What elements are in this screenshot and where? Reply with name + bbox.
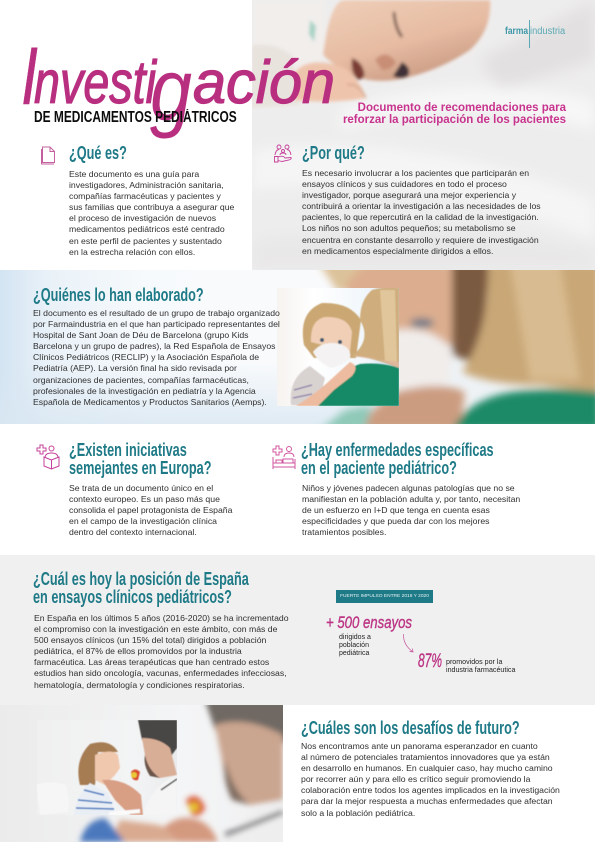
heading: Hay enfermedades específicas: ¿Hay enfermedades específicas	[301, 440, 494, 460]
text: Cuáles son los desafíos: colaboración entre todos los agentes implicados en la investigación	[301, 785, 560, 795]
arrow: to 87%	[403, 634, 414, 652]
text: Quiénes: por Farmaindustria en el que han participado representantes del	[33, 319, 280, 329]
text: dirigidos a población pediátrica: población	[339, 642, 369, 649]
text: Por qué: en medicamentos especialmente dirigidos a ellos.	[302, 246, 493, 256]
text: Qué es: sus familias que contribuya a asegurar que	[69, 202, 234, 212]
text: Cuál es hoy: hematología, dermatología y condiciones respiratorias.	[34, 680, 245, 690]
photo: background doctor blurred	[0, 705, 283, 842]
text: Qué es: en la estrecha relación con ellos.	[69, 247, 195, 257]
title: Investigación	[21, 31, 335, 139]
text: Existen iniciativas: dentro del contexto internacional.	[69, 527, 197, 537]
text: Qué es: medicamentos pediátricos esté centrado	[69, 224, 225, 234]
text: Por qué: pacientes, lo que repercutirá en la calidad de la investigación.	[302, 212, 539, 222]
text: Quiénes: profesionales de la investigación en pediatría y la Agencia	[33, 386, 256, 396]
icon: family in hand	[274, 144, 292, 162]
text: Qué es: en este perfil de pacientes y sustentado	[69, 236, 222, 246]
text: Hay enfermedades: tratamientos posibles.	[302, 527, 386, 537]
text: Existen iniciativas: Se trata de un documento único en el	[69, 483, 213, 493]
text: Quiénes: Hospital de Sant Joan de Déu de Barcelona (grupo Kids	[33, 330, 248, 340]
text: Existen iniciativas: en el campo de la investigación clínica	[69, 516, 217, 526]
photo: doctor examining child	[37, 720, 177, 815]
heading: Cuáles son los desafíos: ¿Cuáles son los desafíos de futuro?	[301, 718, 520, 738]
text: Por qué: Los niños no son adultos pequeños; su metabolismo se	[302, 223, 516, 233]
label: fuerte impulso: FUERTE IMPULSO ENTRE 2016 Y 2020	[340, 594, 429, 599]
text: promovidos por la industria: promovidos por la	[446, 658, 502, 666]
photo: child with mask hugging mother	[277, 288, 399, 406]
subtitle: documento de recomendaciones: reforzar la participación de los pacientes	[343, 114, 566, 126]
text: Por qué: investigador, porque asegurará una mejor experiencia y	[302, 190, 516, 200]
text: Cuál es hoy: el compromiso con la investigación en este ámbito, con más de	[34, 624, 277, 634]
text: Qué es: Este documento es una guía para	[69, 169, 199, 179]
icon: cross, person and bed	[272, 446, 296, 469]
text: Cuáles son los desafíos	[301, 741, 560, 818]
text: dirigidos a población pediátrica	[339, 634, 371, 657]
text: Qué es: el proceso de investigación de nuevos	[69, 213, 216, 223]
text: promovidos por la industria	[446, 658, 516, 674]
text: Por qué: Es necesario involucrar a los pacientes que participarán en	[302, 168, 529, 178]
text: Hay enfermedades	[302, 483, 520, 537]
text: Qué es: investigadores, Administración sanitaria,	[69, 180, 224, 190]
text: Existen iniciativas: contexto europeo. Es un paso más que	[69, 494, 220, 504]
text: Por qué	[302, 168, 541, 256]
title: Investigación: ación	[193, 49, 335, 116]
text: Quiénes: Española de Medicamentos y Productos Sanitarios (Aemps).	[33, 397, 267, 407]
heading: Cuál es hoy la posición: en ensayos clínicos pediátricos?	[33, 586, 232, 606]
heading: Hay enfermedades específicas: en el paciente pediátrico?	[301, 458, 457, 478]
text: Hay enfermedades: de un esfuerzo en I+D que tenga en cuenta esas	[302, 505, 490, 515]
subtitle: documento de recomendaciones	[343, 102, 566, 126]
text: Cuáles son los desafíos: Nos encontramos ante un panorama esperanzador en cuanto	[301, 741, 538, 751]
heading: Quiénes lo han elaborado: ¿Quiénes lo han elaborado?	[33, 285, 204, 305]
text: Hay enfermedades: especificidades y que pueda dar con los mejores	[302, 516, 490, 526]
text: dirigidos a población pediátrica: pediátrica	[339, 650, 369, 657]
text: Quiénes: Barcelona y un grupo de padres), la Red Española de Ensayos	[33, 341, 276, 351]
heading: Hay enfermedades específicas	[301, 440, 494, 478]
heading: Por qué: ¿Por qué?	[302, 143, 365, 163]
heading: Existen iniciativas: ¿Existen iniciativas	[69, 440, 187, 460]
logo: farmaindustria: industria	[530, 26, 565, 37]
heading: Cuál es hoy la posición	[33, 569, 249, 607]
text: Cuáles son los desafíos: para dar la mejor respuesta a muchas enfermedades que afectan	[301, 796, 553, 806]
text: promovidos por la industria: industria farmacéutica	[446, 666, 515, 674]
panel: posición de España	[0, 555, 595, 705]
subtitle: De medicamentos pediátricos: DE MEDICAMENTOS PEDIÁTRICOS	[34, 109, 237, 126]
heading: Existen iniciativas: semejantes en Europa?	[69, 458, 211, 478]
text: Por qué: encuentra en constante desarrollo y requiere de investigación	[302, 235, 539, 245]
heading: Qué es: ¿Qué es?	[69, 143, 127, 163]
text: Cuáles son los desafíos: en desarrollo en humanos. En cualquier caso, hay mucho camino	[301, 763, 553, 773]
text: Cuáles son los desafíos: solo a la población pediátrica.	[301, 808, 415, 818]
title: Investigación: I	[21, 31, 38, 122]
text: Quiénes: Pediatría (AEP). La versión final ha sido revisada por	[33, 363, 237, 373]
icon: cross and person reading	[36, 444, 60, 470]
text: Qué es	[69, 169, 234, 257]
logo: farmaindustria: farma	[505, 26, 528, 37]
text: Existen iniciativas: consolida el papel protagonista de España	[69, 505, 232, 515]
text: Cuál es hoy: pediátrica, el 87% de ellos promovidos por la industria	[34, 646, 242, 656]
heading: Existen iniciativas	[69, 440, 211, 478]
label: fuerte impulso	[336, 590, 433, 603]
heading: Cuál es hoy la posición: ¿Cuál es hoy la posición de España	[33, 569, 249, 589]
text: Existen iniciativas	[69, 483, 232, 537]
text: Quiénes: Clínicos Pediátricos (RECLIP) y la Asociación Española de	[33, 352, 259, 362]
panel: quiénes background photo	[0, 270, 595, 424]
text: Quiénes	[33, 308, 280, 407]
text: Quiénes: organizaciones de pacientes, compañías farmacéuticas,	[33, 375, 249, 385]
text: Cuál es hoy: En España en los últimos 5 años (2016-2020) se ha incrementado	[34, 613, 289, 623]
icon: document	[41, 146, 55, 164]
text: Por qué: contribuirá a orientar la investigación a las necesidades de los	[302, 201, 541, 211]
title: Investigación: g	[150, 40, 192, 139]
text: Cuáles son los desafíos: al número de potenciales tratamientos innovadores que ya están	[301, 752, 550, 762]
logo: farmaindustria	[505, 20, 566, 48]
subtitle: documento de recomendaciones: Documento de recomendaciones para	[358, 102, 566, 114]
text: dirigidos a población pediátrica: dirigidos a	[339, 634, 371, 641]
text: Cuál es hoy	[34, 613, 289, 690]
text: Por qué: ensayos clínicos y sus cuidadores en todo el proceso	[302, 179, 507, 189]
photo: sleeping baby	[252, 0, 595, 270]
text: Qué es: compañías farmacéuticas y pacientes y	[69, 191, 221, 201]
text: Cuáles son los desafíos: por recorrer aún y para ello es crítico seguir promoviendo la	[301, 774, 530, 784]
title: Investigación: nvesti	[34, 49, 157, 116]
text: Cuál es hoy: farmacéutica. Las áreas terapéuticas que han centrado estos	[34, 657, 269, 667]
text: Quiénes: El documento es el resultado de un grupo de trabajo organizado	[33, 308, 280, 318]
text: Cuál es hoy: estudios han sido oncología, vacunas, enfermedades infecciosas,	[34, 668, 287, 678]
text: Cuál es hoy: 500 ensayos clínicos (un 15% del total) dirigidos a población	[34, 635, 266, 645]
text: Hay enfermedades: Niños y jóvenes padecen algunas patologías que no se	[302, 483, 515, 493]
text: Hay enfermedades: manifiestan en la población adulta y, por tanto, necesitan	[302, 494, 520, 504]
